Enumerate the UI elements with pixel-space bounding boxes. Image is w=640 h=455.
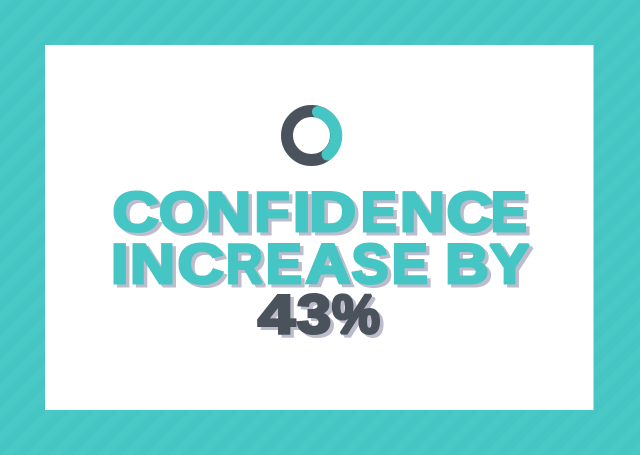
title shadow: I [296,183,314,246]
title shadow: F [258,183,293,246]
title letters: F [254,180,290,243]
title shadow: N [134,235,178,298]
icon: donut progress ring [287,111,336,160]
statistic shadow [262,286,384,348]
title shadow: E [364,183,400,246]
statistic value: 3 [297,283,331,345]
title letters: E [491,180,527,243]
title letters: C [447,180,493,243]
statistic value [258,283,380,345]
title shadow: D [312,183,360,246]
title letters: N [206,180,251,243]
title shadow: S [355,235,392,298]
title letters: R [226,232,262,295]
statistic shadow: % [336,286,384,348]
statistic: 43% [258,283,384,348]
title letters [111,180,530,295]
title letters: N [130,232,175,295]
title shadow: C [116,183,162,246]
title shadow: B [449,235,492,298]
title shadow: A [309,235,354,298]
title letters: E [361,180,397,243]
statistic value: % [332,283,380,345]
title shadow [114,183,533,298]
title shadow: C [450,183,496,246]
white central panel [45,45,594,410]
title shadow: I [114,235,132,298]
statistic shadow: 3 [300,286,334,348]
title letters: C [178,232,224,295]
statistic value: 4 [258,283,295,345]
title shadow: Y [493,235,533,298]
title letters: E [266,232,302,295]
title letters: I [293,180,310,243]
title shadow: N [404,183,448,246]
title letters: Y [490,232,530,295]
statistic shadow: 4 [262,286,299,348]
title shadow: O [162,183,209,246]
title shadow: E [494,183,530,246]
title letters: O [159,180,205,243]
title shadow: N [210,183,254,246]
title: confidence increase by [111,180,533,298]
title shadow: R [230,235,266,298]
title letters: A [306,232,350,295]
title shadow: C [181,235,227,298]
title letters: N [400,180,445,243]
title letters: S [352,232,388,295]
title letters: I [111,232,128,295]
title letters: E [392,232,428,295]
title letters: D [309,180,356,243]
title shadow: E [269,235,305,298]
title shadow: E [395,235,431,298]
title letters: C [113,180,159,243]
title letters: B [445,232,489,295]
